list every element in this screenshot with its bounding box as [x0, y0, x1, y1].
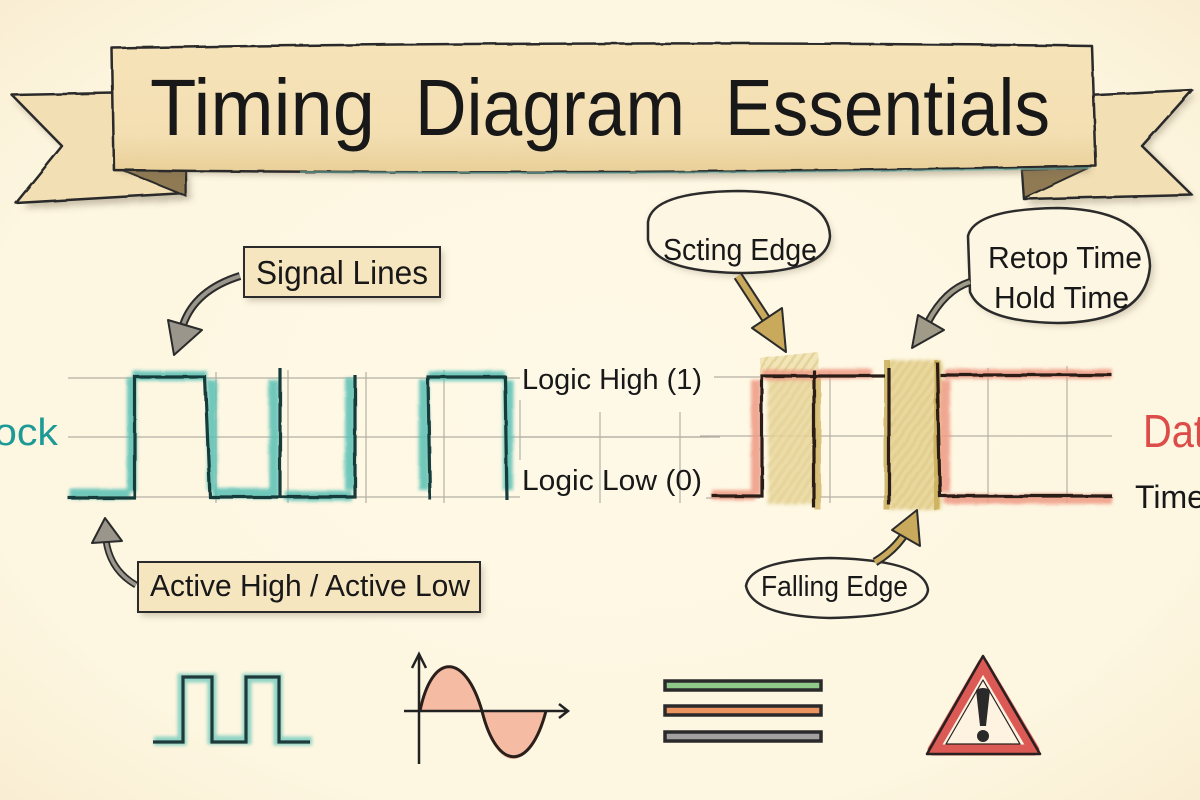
icon: square wave	[153, 677, 312, 742]
signal lines callout: Signal Lines	[256, 254, 428, 291]
clock waveform	[68, 368, 508, 500]
arrow: falling edge	[875, 510, 920, 562]
icon: sine wave	[404, 654, 568, 764]
title banner	[12, 43, 1196, 208]
retop / hold time bubble	[968, 208, 1154, 326]
active high / low callout	[138, 562, 483, 616]
active high / low callout: Active High / Active Low	[150, 568, 471, 603]
signal lines callout	[244, 247, 443, 301]
retop / hold time bubble: Hold Time	[994, 280, 1129, 315]
falling edge bubble	[746, 558, 928, 618]
text: Logic Low (0)	[522, 465, 702, 497]
title: Timing	[150, 63, 375, 152]
arrow: setting edge	[738, 276, 786, 352]
grid: clock	[68, 370, 720, 503]
logic labels: Logic High (1)	[522, 364, 702, 396]
icon: bus lines	[665, 681, 821, 741]
icon: warning triangle	[927, 656, 1040, 754]
banner right tail	[1022, 90, 1196, 206]
data waveform	[712, 362, 1112, 508]
arrow: retop	[912, 282, 970, 348]
setting edge bubble: Scting Edge	[663, 232, 817, 267]
banner left tail	[12, 93, 192, 208]
banner body	[120, 160, 1090, 178]
arrow: active	[92, 518, 136, 585]
setting edge bubble	[648, 191, 833, 277]
title: Essentials	[725, 63, 1050, 152]
retop / hold time bubble: Retop Time	[988, 240, 1142, 275]
falling edge bubble: Falling Edge	[761, 571, 908, 603]
setup window hatch	[760, 352, 942, 510]
title	[150, 63, 1050, 152]
arrow: signal lines	[168, 276, 240, 355]
title: Diagram	[415, 63, 685, 152]
grid: data	[700, 366, 1112, 503]
